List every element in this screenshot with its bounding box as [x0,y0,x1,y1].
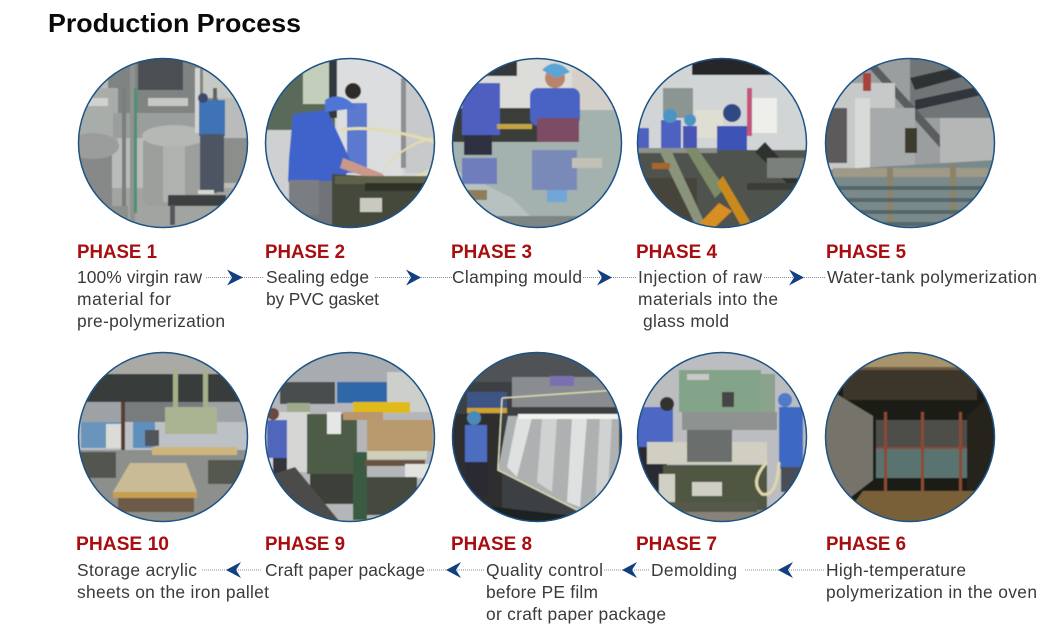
title: Production Process [48,8,301,38]
arrow: phase 3 to 4 [583,270,637,286]
phase 7 text: PHASE 7 [636,534,717,555]
circle border [78,352,248,522]
phase 9 text: PHASE 9 [265,534,345,555]
phase 4 text: glass mold [643,311,729,331]
arrow: phase 4 to 5 [764,270,826,286]
phase 6 text: PHASE 6 [826,534,906,555]
circle border [78,58,248,228]
circle border [266,58,434,228]
photo: phase 2 sealing edge [265,58,435,228]
phase 8 text: or craft paper package [486,604,666,624]
phase 8 text: PHASE 8 [451,534,532,555]
phase 7 text [636,534,737,580]
arrow: phase 8 to 9 [427,562,485,578]
phase 2 text: by PVC gasket [266,289,379,309]
circle border [826,352,994,522]
phase 2 text: PHASE 2 [265,242,345,263]
phase 4 text: Injection of raw [638,267,762,287]
phase 1 text: PHASE 1 [77,242,157,263]
phase 6 text [826,534,1037,602]
arrow: phase 2 to 3 [375,270,452,286]
circle border [826,58,994,228]
phase 1 text: material for [77,289,171,309]
arrow: phase 1 to 2 [206,270,264,286]
phase 4 text: PHASE 4 [636,242,717,263]
photo: phase 9 craft paper [265,352,435,522]
circle border [638,58,806,228]
phase 3 text: Clamping mould [452,267,582,287]
circle border [266,352,434,522]
circle border [452,352,622,522]
arrow: phase 9 to 10 [202,562,262,578]
phase 9 text: Craft paper package [265,560,425,580]
phase 8 text: before PE film [486,582,598,602]
photo: phase 8 quality control [452,352,622,522]
phase 5 text: Water-tank polymerization [827,267,1037,287]
phase 5 text [826,242,1037,287]
phase 2 text: Sealing edge [266,267,369,287]
photo: phase 3 clamping mould [452,58,622,228]
photo: phase 10 storage [78,352,248,522]
phase 3 text: PHASE 3 [451,242,532,263]
phase 1 text: pre-polymerization [77,311,225,331]
photo: phase 4 injection [637,58,807,233]
circle border [452,58,622,228]
photo: phase 6 oven [825,352,995,522]
photo: phase 5 water tank [825,58,995,228]
photo: phase 1 reactor [67,58,248,228]
phase 8 text: Quality control [486,560,603,580]
phase 6 text: polymerization in the oven [826,582,1037,602]
photo: phase 7 demolding [637,352,807,522]
phase 10 text: PHASE 10 [76,534,169,555]
phase 3 text [451,242,582,287]
phase 4 text: materials into the [638,289,778,309]
circle border [638,352,806,522]
phase 9 text [265,534,425,580]
phase 10 text: sheets on the iron pallet [77,582,269,602]
phase 10 text: Storage acrylic [77,560,197,580]
phase 1 text: 100% virgin raw [77,267,202,287]
phase 5 text: PHASE 5 [826,242,906,263]
phase 7 text: Demolding [651,560,737,580]
phase 4 text [636,242,778,331]
phase 1 text [77,242,225,331]
arrow: phase 6 to 7 [745,562,825,578]
phase 6 text: High-temperature [826,560,966,580]
arrow: phase 7 to 8 [604,562,650,578]
phase 8 text [451,534,666,624]
phase 10 text [76,534,269,602]
phase 2 text [265,242,379,309]
